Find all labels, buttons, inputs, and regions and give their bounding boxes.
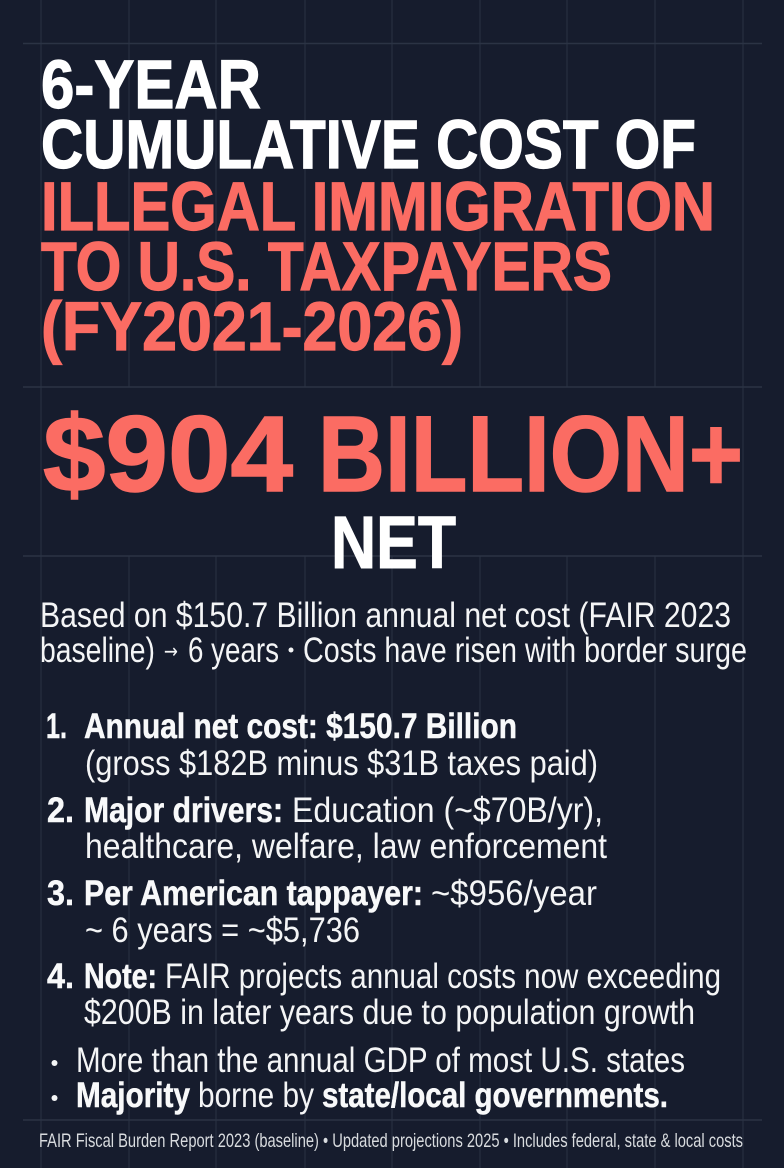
basis line 2: 6 years — [188, 631, 279, 670]
title — [41, 46, 715, 365]
item 1 — [46, 707, 598, 783]
bullet: state and local burden: borne by — [198, 1076, 314, 1115]
basis line 2: → — [164, 639, 178, 663]
item 2: 2. — [47, 791, 74, 830]
item 2: Major drivers: — [84, 791, 283, 830]
amount: $904 — [43, 393, 293, 514]
bullet: GDP comparison: More than the annual GDP of most U.S. states — [76, 1041, 685, 1080]
title line: fiscal years: (FY2021-2026) — [41, 288, 463, 365]
item 1: 1. — [46, 707, 67, 746]
bullet: state and local burden: state/local governments. — [322, 1076, 668, 1115]
item 1: Annual net cost: $150.7 Billion — [84, 707, 517, 746]
item 2: Education (~$70B/yr), — [292, 791, 603, 830]
basis line 2 — [40, 631, 747, 670]
bullet: state and local burden: Majority — [76, 1076, 190, 1115]
item 3: Per American tappayer: — [84, 874, 423, 913]
item 4: 4. — [47, 957, 74, 996]
headline figure — [43, 393, 743, 514]
bullet list — [52, 1041, 685, 1115]
basis statement — [40, 596, 747, 670]
item 4: $200B in later years due to population growth — [84, 993, 695, 1032]
bullet: state and local burden — [52, 1076, 668, 1115]
item 2 — [47, 791, 607, 866]
item 2: healthcare, welfare, law enforcement — [85, 827, 607, 866]
title line: to U.S. taxpayers: TO U.S. TAXPAYERS — [41, 228, 612, 305]
numbered list — [46, 707, 721, 1032]
item 1: (gross $182B minus $31B taxes paid) — [85, 744, 598, 783]
net label: NET — [331, 501, 456, 584]
basis line 2: baseline) — [40, 631, 155, 670]
item 4: Note: — [84, 957, 157, 996]
item 3 — [47, 874, 597, 950]
item 3: 3. — [47, 874, 74, 913]
item 3: ~ 6 years = ~$5,736 — [85, 911, 360, 950]
item 3: ~$956/year — [431, 874, 597, 913]
title line: 6-year: 6-YEAR — [41, 46, 261, 123]
item 4 — [47, 957, 721, 1032]
